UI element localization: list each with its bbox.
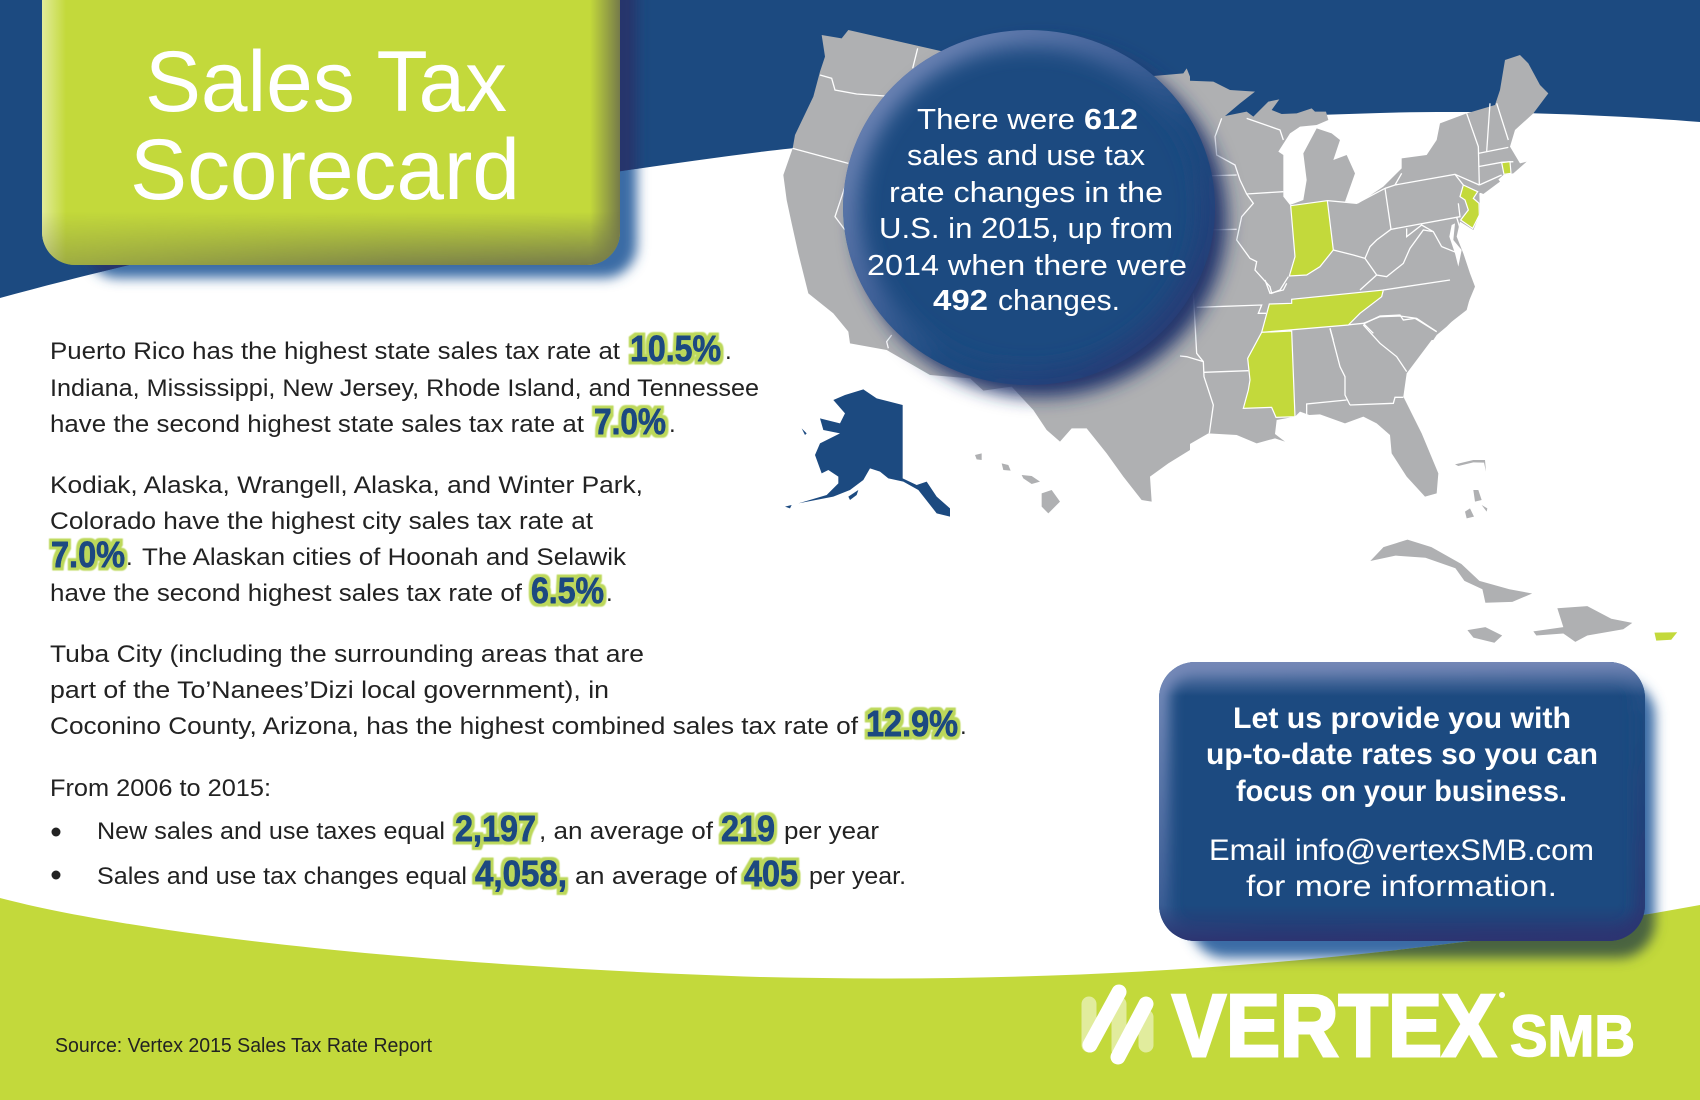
title (130, 34, 520, 218)
Alaska in navy (785, 389, 950, 517)
text block: highest city rate (50, 472, 643, 611)
background: navy top wave (0, 0, 1700, 298)
circle text (867, 104, 1187, 317)
text block: highest state rate: have the second highest state sales tax rate at (50, 411, 584, 438)
callout shadow on green (1225, 912, 1664, 966)
text block: 2006 to 2015 list (50, 775, 906, 894)
circle text: There were (917, 104, 1075, 136)
bullet one: per year (784, 818, 879, 845)
Puerto Rico in green (1654, 632, 1677, 641)
bullet one: New sales and use taxes equal (97, 818, 445, 845)
grey land: western, southern and northern states, Hawaii (783, 30, 1548, 518)
box contact text: Email info@vertexSMB.com (1209, 834, 1594, 867)
bullet one (52, 808, 879, 849)
bullet two: 4,058, (475, 853, 567, 894)
circle text: sales and use tax (907, 140, 1146, 172)
text block: highest state rate: . (725, 338, 732, 365)
text block: highest city rate: The Alaskan cities of Hoonah and Selawik (142, 544, 627, 571)
text block: highest combined rate: part of the To’Nanees’Dizi local government), in (50, 677, 609, 704)
state borders (793, 48, 1513, 433)
text block: highest city rate: 7.0% (51, 534, 125, 575)
map of the United States and Caribbean (783, 30, 1677, 643)
circle text: 612 (1084, 104, 1138, 136)
logo wordmark: VERTEX (1172, 976, 1496, 1075)
bullet one: 219 (721, 808, 775, 849)
callout shadow on white (1190, 680, 1655, 958)
logo suffix: SMB (1510, 1004, 1635, 1069)
text block: highest state rate: 7.0% (594, 401, 666, 442)
title card shadow on white (85, 0, 637, 278)
text block: highest state rate (50, 328, 759, 442)
text block: highest city rate: have the second highest sales tax rate of (50, 580, 522, 607)
text block: highest city rate: . (126, 544, 133, 571)
box contact text: for more information. (1246, 870, 1557, 903)
callout circle: 612 changes (843, 30, 1227, 397)
card body (42, 0, 620, 265)
circle text: changes. (998, 285, 1120, 317)
Caribbean islands in grey (1370, 540, 1632, 643)
text block: highest combined rate: Tuba City (including the surrounding areas that are (50, 641, 644, 668)
circle text: rate changes in the (889, 177, 1163, 209)
box heading text (1206, 702, 1598, 808)
text block: highest city rate: . (606, 580, 613, 607)
circle text: 492 (933, 285, 988, 317)
text block: 2006 to 2015 list: From 2006 to 2015: (50, 775, 271, 802)
registered mark (1499, 992, 1505, 998)
circle text: U.S. in 2015, up from (879, 213, 1173, 245)
Chesapeake Bay (1449, 223, 1462, 267)
circle shadow (855, 42, 1227, 397)
text block: highest city rate: 6.5% (531, 570, 604, 611)
text block: highest state rate: . (669, 411, 676, 438)
box heading text: Let us provide you with (1233, 702, 1571, 735)
logo mark (1089, 992, 1146, 1057)
title: Sales Tax (145, 34, 507, 130)
text block: highest state rate: 10.5% (630, 328, 721, 369)
bullet two: per year. (809, 863, 906, 890)
title: Scorecard (130, 122, 520, 218)
bullet two: an average of (575, 863, 737, 890)
text block: highest state rate: Puerto Rico has the highest state sales tax rate at (50, 338, 620, 365)
bullet two: Sales and use tax changes equal (97, 863, 467, 890)
bullet two (52, 853, 906, 894)
text block: highest combined rate: Coconino County, Arizona, has the highest combined sales tax rate of (50, 713, 858, 740)
text block: highest city rate: Colorado have the highest city sales tax rate at (50, 508, 593, 535)
source note: Source: Vertex 2015 Sales Tax Rate Report (55, 1035, 432, 1057)
text block: highest combined rate: . (960, 713, 967, 740)
text block: highest city rate: Kodiak, Alaska, Wrangell, Alaska, and Winter Park, (50, 472, 643, 499)
box body (1159, 662, 1645, 941)
highlighted states at second-highest rate (1243, 162, 1511, 417)
bullet one: 2,197 (455, 808, 536, 849)
box heading text: up-to-date rates so you can (1206, 738, 1598, 771)
logo: Vertex SMB (1089, 976, 1635, 1075)
text block: highest combined rate (50, 641, 967, 744)
circle body (843, 30, 1215, 385)
text block: highest combined rate: 12.9% (866, 703, 958, 744)
background: green bottom wave (0, 898, 1700, 1100)
box heading text: focus on your business. (1236, 775, 1567, 808)
title card shadow on navy (85, 0, 637, 278)
title card (42, 0, 620, 265)
callout box: contact (1159, 662, 1645, 941)
circle text: 2014 when there were (867, 250, 1187, 282)
bullet one: , an average of (539, 818, 713, 845)
text block: highest state rate: Indiana, Mississippi, New Jersey, Rhode Island, and Tennessee (50, 375, 759, 402)
bullet two: 405 (744, 853, 798, 894)
box contact text (1209, 834, 1594, 903)
